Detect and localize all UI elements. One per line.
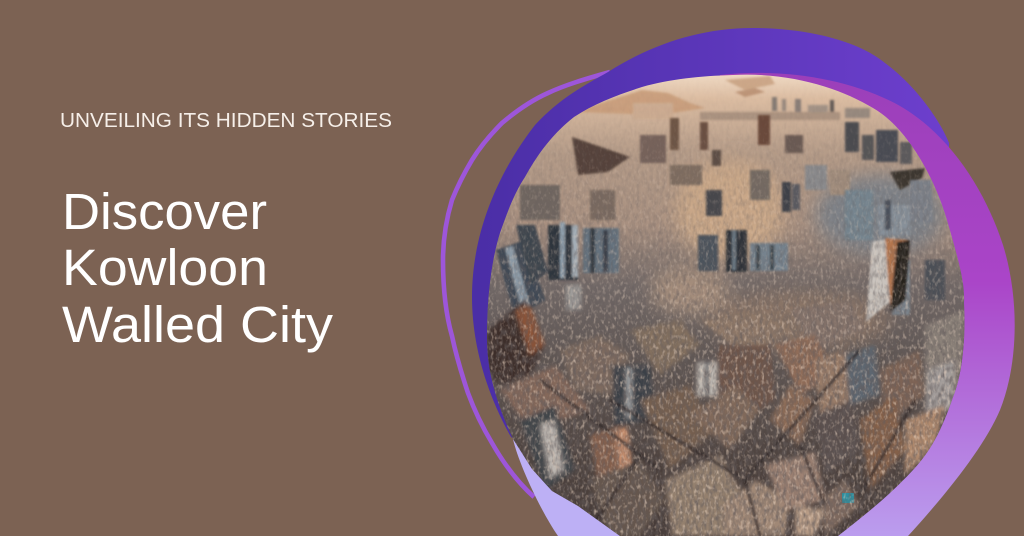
large grey-blue towers xyxy=(496,180,945,318)
distant skyline xyxy=(574,76,870,120)
title: Kowloon xyxy=(62,239,268,296)
dark diagonal streets xyxy=(540,350,915,536)
thin purple arc xyxy=(443,72,610,497)
title xyxy=(62,183,334,353)
soft tone patches xyxy=(650,160,945,350)
magenta blob xyxy=(700,73,1015,536)
building texture xyxy=(487,126,964,536)
title: Walled City xyxy=(62,296,334,353)
white and orange tower xyxy=(866,237,910,322)
lavender blob xyxy=(513,439,660,536)
aerial city photo xyxy=(480,70,970,536)
subtitle: UNVEILING ITS HIDDEN STORIES xyxy=(60,110,392,132)
blue blob xyxy=(472,28,949,500)
rooftop pool xyxy=(842,493,854,503)
mid-distance dark towers xyxy=(520,115,925,220)
title: Discover xyxy=(62,183,267,240)
foreground city blocks xyxy=(487,285,965,536)
